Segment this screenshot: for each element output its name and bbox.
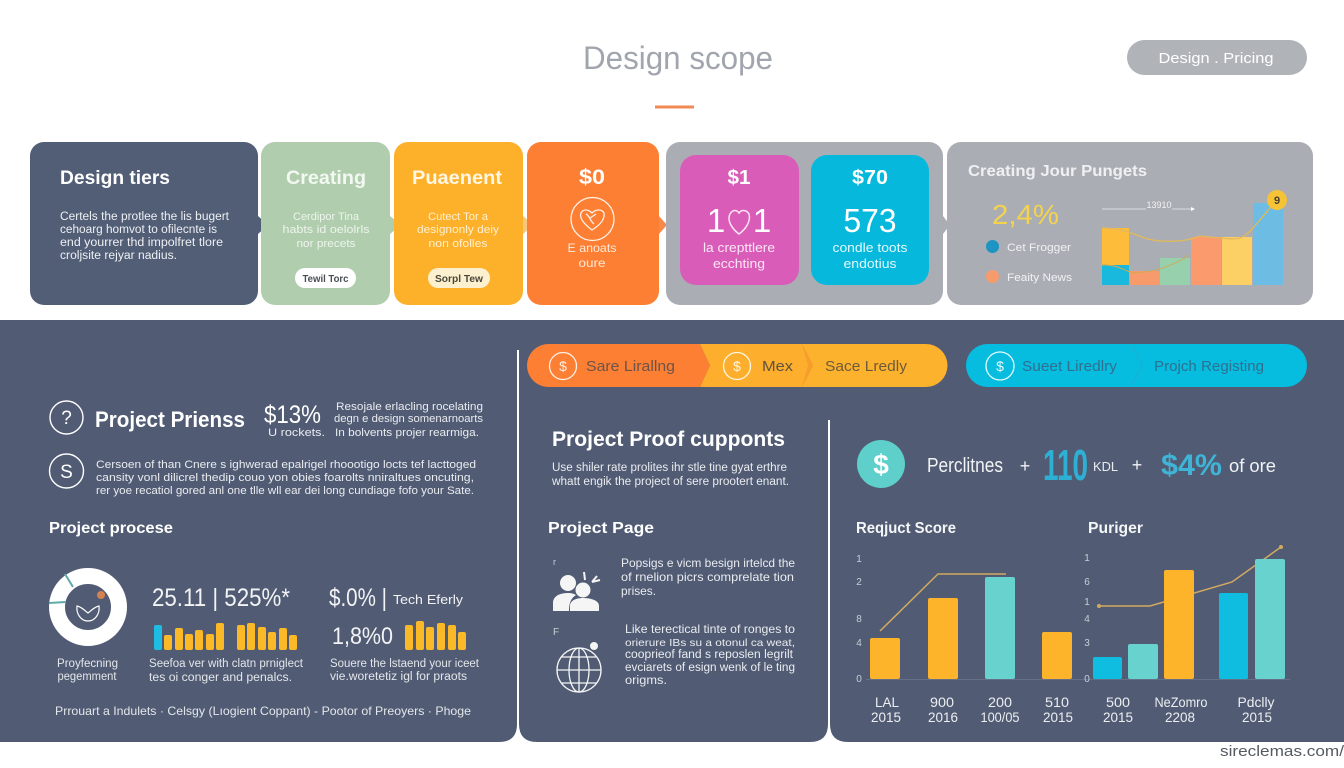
- band joining the lower panels: [517, 320, 519, 350]
- mini bars: right: [405, 621, 466, 650]
- panel: puaenent: non ofolles: [428, 238, 488, 250]
- axis labels: 2208: [1165, 709, 1195, 725]
- axis labels: NeZomro: [1154, 694, 1208, 710]
- card: cyan $70: endotius: [844, 257, 896, 271]
- tag: sorpl tew: [428, 268, 490, 288]
- bar chart: puriger: [1084, 545, 1285, 685]
- icon: question: [50, 401, 83, 434]
- pill: design pricing: Design . Pricing: [1158, 50, 1274, 67]
- text: globe description: Like terectical tinte of ronges to: [625, 622, 795, 636]
- text: paragraph: Cersoen of than Cnere s ighwerad epalrigel rhoootigo locts tef lacttoged: [96, 459, 476, 471]
- bar chart: reject score: 0: [856, 674, 862, 685]
- axis labels: 200: [988, 694, 1012, 710]
- icon: dollar: $: [733, 358, 741, 374]
- legend: Feaity News: [1007, 272, 1073, 284]
- pill bar: orange steps: [527, 344, 948, 387]
- bar chart: reject score: [856, 554, 1290, 685]
- pill bar: cyan steps: Sueet Liredlry: [1022, 358, 1117, 375]
- watermark url: sireclemas.com/: [1220, 743, 1344, 760]
- text: globe description: orierure IBs su a otonul ca weat,: [625, 637, 795, 649]
- icon: dollar: [986, 352, 1014, 380]
- stat: 1,8%0: 1,8%0: [332, 623, 393, 650]
- icon: people: r: [553, 557, 556, 567]
- panel: design tiers: end yourrer thd impolfret tlore: [60, 237, 223, 249]
- pill bar: orange steps: Sare Lirallng: [586, 358, 675, 375]
- axis labels: 2015: [1242, 709, 1272, 725]
- text: people description: [621, 556, 795, 598]
- panel: creating: Creating: [286, 168, 366, 189]
- tag: tewil tore: Tewil Torc: [302, 274, 349, 285]
- axis labels: [871, 694, 1274, 725]
- axis labels: 510: [1045, 694, 1069, 710]
- stat row: +: [1020, 456, 1030, 476]
- legend: [986, 240, 1073, 284]
- panel: creating: nor precets: [296, 238, 356, 250]
- panel: puaenent: [394, 142, 534, 305]
- card: pink $1: $1: [728, 167, 750, 189]
- panel: puaenent: Cutect Tor a: [428, 211, 489, 223]
- panel: creating jour pungets: Creating Jour Pungets: [968, 163, 1147, 180]
- axis labels: LAL: [875, 694, 899, 710]
- bar chart: puriger: 4: [1084, 614, 1090, 625]
- title: [583, 40, 773, 108]
- pill bar: orange steps: Sace Lredly: [825, 358, 908, 375]
- heading: puriger: Puriger: [1088, 520, 1143, 537]
- text: paragraph: rer yoe recatiol gored anl one tlle wll ear dei long cundiage fofo your Sate.: [96, 485, 474, 497]
- stat: 13 percent: $13%: [264, 401, 321, 429]
- icon: dollar: $: [559, 358, 567, 374]
- icon: dollar: [550, 352, 576, 380]
- axis labels: 900: [930, 694, 954, 710]
- icon: dollar: $: [996, 358, 1004, 374]
- bar chart: puriger: 6: [1084, 577, 1090, 588]
- axis labels: 2015: [1103, 709, 1133, 725]
- axis labels: 2015: [871, 709, 901, 725]
- bar chart: puriger: 3: [1084, 638, 1090, 649]
- bar chart: puriger: 1: [1084, 597, 1090, 608]
- bar chart: puriger: 0: [1084, 674, 1090, 685]
- axis labels: 2015: [1043, 709, 1073, 725]
- panel: design tiers: croljsite rejyar nadius.: [60, 250, 177, 262]
- bar chart: reject score: 1: [856, 554, 862, 565]
- panel: lower right: [830, 320, 1344, 742]
- text: globe description: evciarets of esign wenk of le ting: [625, 662, 795, 674]
- pill bar: cyan steps: Projch Registing: [1154, 358, 1264, 375]
- icon: question: ?: [61, 408, 72, 429]
- panel: lower left: [0, 320, 517, 742]
- mini bars: left: [154, 623, 297, 650]
- card: pink $1: 1: [707, 202, 725, 239]
- stat row: $: [873, 449, 889, 480]
- card: pink $1: la crepttlere: [703, 241, 775, 255]
- icon: dollar: [724, 352, 750, 380]
- axis labels: Pdclly: [1238, 694, 1274, 710]
- bar chart: reject score: 4: [856, 638, 862, 649]
- text: left stat caption: [149, 658, 304, 684]
- pill: design pricing: [1127, 40, 1307, 75]
- stat row: $4%: [1161, 449, 1222, 482]
- axis labels: 100/05: [980, 709, 1020, 725]
- panel: creating: habts id oelolrls: [282, 224, 370, 236]
- text: supports description: whatt engik the project of sere prootert enant.: [551, 476, 789, 488]
- panel: puaenent: designonly deiy: [417, 224, 500, 236]
- text: paragraph: cansity vonl dilicrel thedip couo yon obies foarolts nniraltues oncuting,: [96, 472, 474, 484]
- tag: tewil tore: [295, 268, 356, 288]
- panel: creating: Cerdipor Tina: [293, 211, 360, 223]
- icon: people: [553, 557, 600, 611]
- pill bar: orange steps: Mex: [762, 358, 794, 375]
- stat: tech everly: $.0% |: [329, 584, 387, 612]
- stat row: Perclitnes: [927, 455, 1003, 477]
- stat: tech everly: [329, 584, 464, 612]
- panel: $0: E anoats: [568, 241, 616, 255]
- text: globe description: origms.: [625, 675, 667, 687]
- icon: dollar circle: [50, 454, 84, 488]
- panel: pricing cards: [666, 142, 950, 305]
- title: Design scope: [583, 40, 773, 76]
- label: donut: pegemment: [58, 671, 117, 683]
- text: paragraph: [96, 459, 476, 497]
- panel: creating: [261, 142, 401, 305]
- card: cyan $70: $70: [852, 167, 888, 189]
- card: pink $1: ecchting: [713, 257, 765, 271]
- icon: dollar circle: S: [60, 462, 73, 483]
- text: people description: of rnelion picrs comprelate tion: [621, 570, 794, 584]
- panel: design tiers: Certels the protlee the lis bugert: [60, 211, 230, 223]
- stat row: [857, 440, 1276, 490]
- bar chart: reject score: 2: [856, 577, 862, 588]
- panel: lower middle: [519, 320, 828, 742]
- text: globe description: cooprieof fand s reposlen legrilt: [625, 649, 794, 661]
- axis labels: 2016: [928, 709, 958, 725]
- panel: design tiers: cehoarg homvot to ofilecnte is: [60, 224, 217, 236]
- card: pink $1: 1: [753, 202, 771, 239]
- text: description: [334, 401, 484, 439]
- heading: reject score: Reqjuct Score: [856, 520, 956, 537]
- band joining middle and right: [828, 320, 830, 420]
- bar chart: reject score: 8: [856, 614, 862, 625]
- text: left stat caption: tes oi conger and penalcs.: [149, 672, 292, 684]
- tag: sorpl tew: Sorpl Tew: [435, 274, 483, 285]
- text: description: Resojale erlacling rocelating: [336, 401, 483, 413]
- panel: $0: oure: [578, 256, 606, 270]
- panel: design tiers: [30, 142, 268, 305]
- text: description: degn e design somenarnoarts: [334, 413, 484, 425]
- heading: project page: Project Page: [548, 520, 654, 537]
- panel: creating jour pungets: 2,4%: [992, 199, 1059, 230]
- heading: project proof supports: Project Proof cupponts: [552, 428, 785, 451]
- text: supports description: [551, 462, 789, 488]
- label: donut: [57, 658, 118, 683]
- legend: Cet Frogger: [1007, 242, 1071, 254]
- text: people description: Popsigs e vicm besign irtelcd the: [621, 556, 795, 570]
- panel: $0: $0: [579, 166, 605, 189]
- donut chart: [49, 574, 119, 638]
- icon: globe: F: [553, 627, 559, 638]
- icon: heart in circle: [571, 198, 614, 240]
- footer text: Prrouart a Indulets · Celsgy (Lıogient Coppant) - Pootor of Preoyers · Phoge: [55, 704, 471, 718]
- text: supports description: Use shiler rate prolites ihr stle tine gyat erthre: [552, 462, 787, 474]
- bar chart: puriger: 1: [1084, 553, 1090, 564]
- panel: puaenent: Puaenent: [412, 168, 503, 189]
- card: cyan $70: 573: [844, 202, 896, 239]
- text: globe description: [625, 622, 795, 687]
- icon: globe: [553, 627, 601, 692]
- pill bar: cyan steps: [966, 344, 1307, 387]
- bar chart: mini: 13910: [1146, 200, 1172, 210]
- card: pink $1: [680, 155, 799, 285]
- text: right stat caption: vie.woretetiz igl for praots: [330, 671, 467, 683]
- stat row: +: [1132, 455, 1142, 475]
- stat row: KDL: [1093, 459, 1118, 474]
- heading: project prienss: Project Prienss: [95, 407, 245, 432]
- axis labels: 500: [1106, 694, 1130, 710]
- text: description: In bolvents projer rearmiga.: [335, 427, 479, 439]
- stat row: of ore: [1229, 456, 1276, 476]
- panel: creating jour pungets: [947, 142, 1313, 305]
- stat: tech everly: Tech Eferly: [393, 592, 464, 607]
- text: people description: prises.: [621, 584, 656, 598]
- text: right stat caption: Souere the lstaend your iceet: [330, 658, 480, 670]
- text: right stat caption: [330, 658, 480, 683]
- bar chart: mini: 9: [1274, 195, 1280, 207]
- text: left stat caption: Seefoa ver with clatn prniglect: [149, 658, 304, 670]
- panel: design tiers: Design tiers: [60, 168, 170, 189]
- bar chart: mini: [1102, 190, 1287, 285]
- stat row: 110: [1043, 441, 1088, 490]
- stat: 25.11 and 525 percent: 25.11 | 525%*: [152, 584, 290, 612]
- heading: project process: Project procese: [49, 520, 173, 537]
- label: donut: Proyfecning: [57, 658, 118, 670]
- stat: 13 percent: U rockets.: [268, 427, 325, 439]
- card: cyan $70: [811, 155, 929, 285]
- panel: $0: [527, 142, 667, 305]
- card: cyan $70: condle toots: [832, 241, 908, 255]
